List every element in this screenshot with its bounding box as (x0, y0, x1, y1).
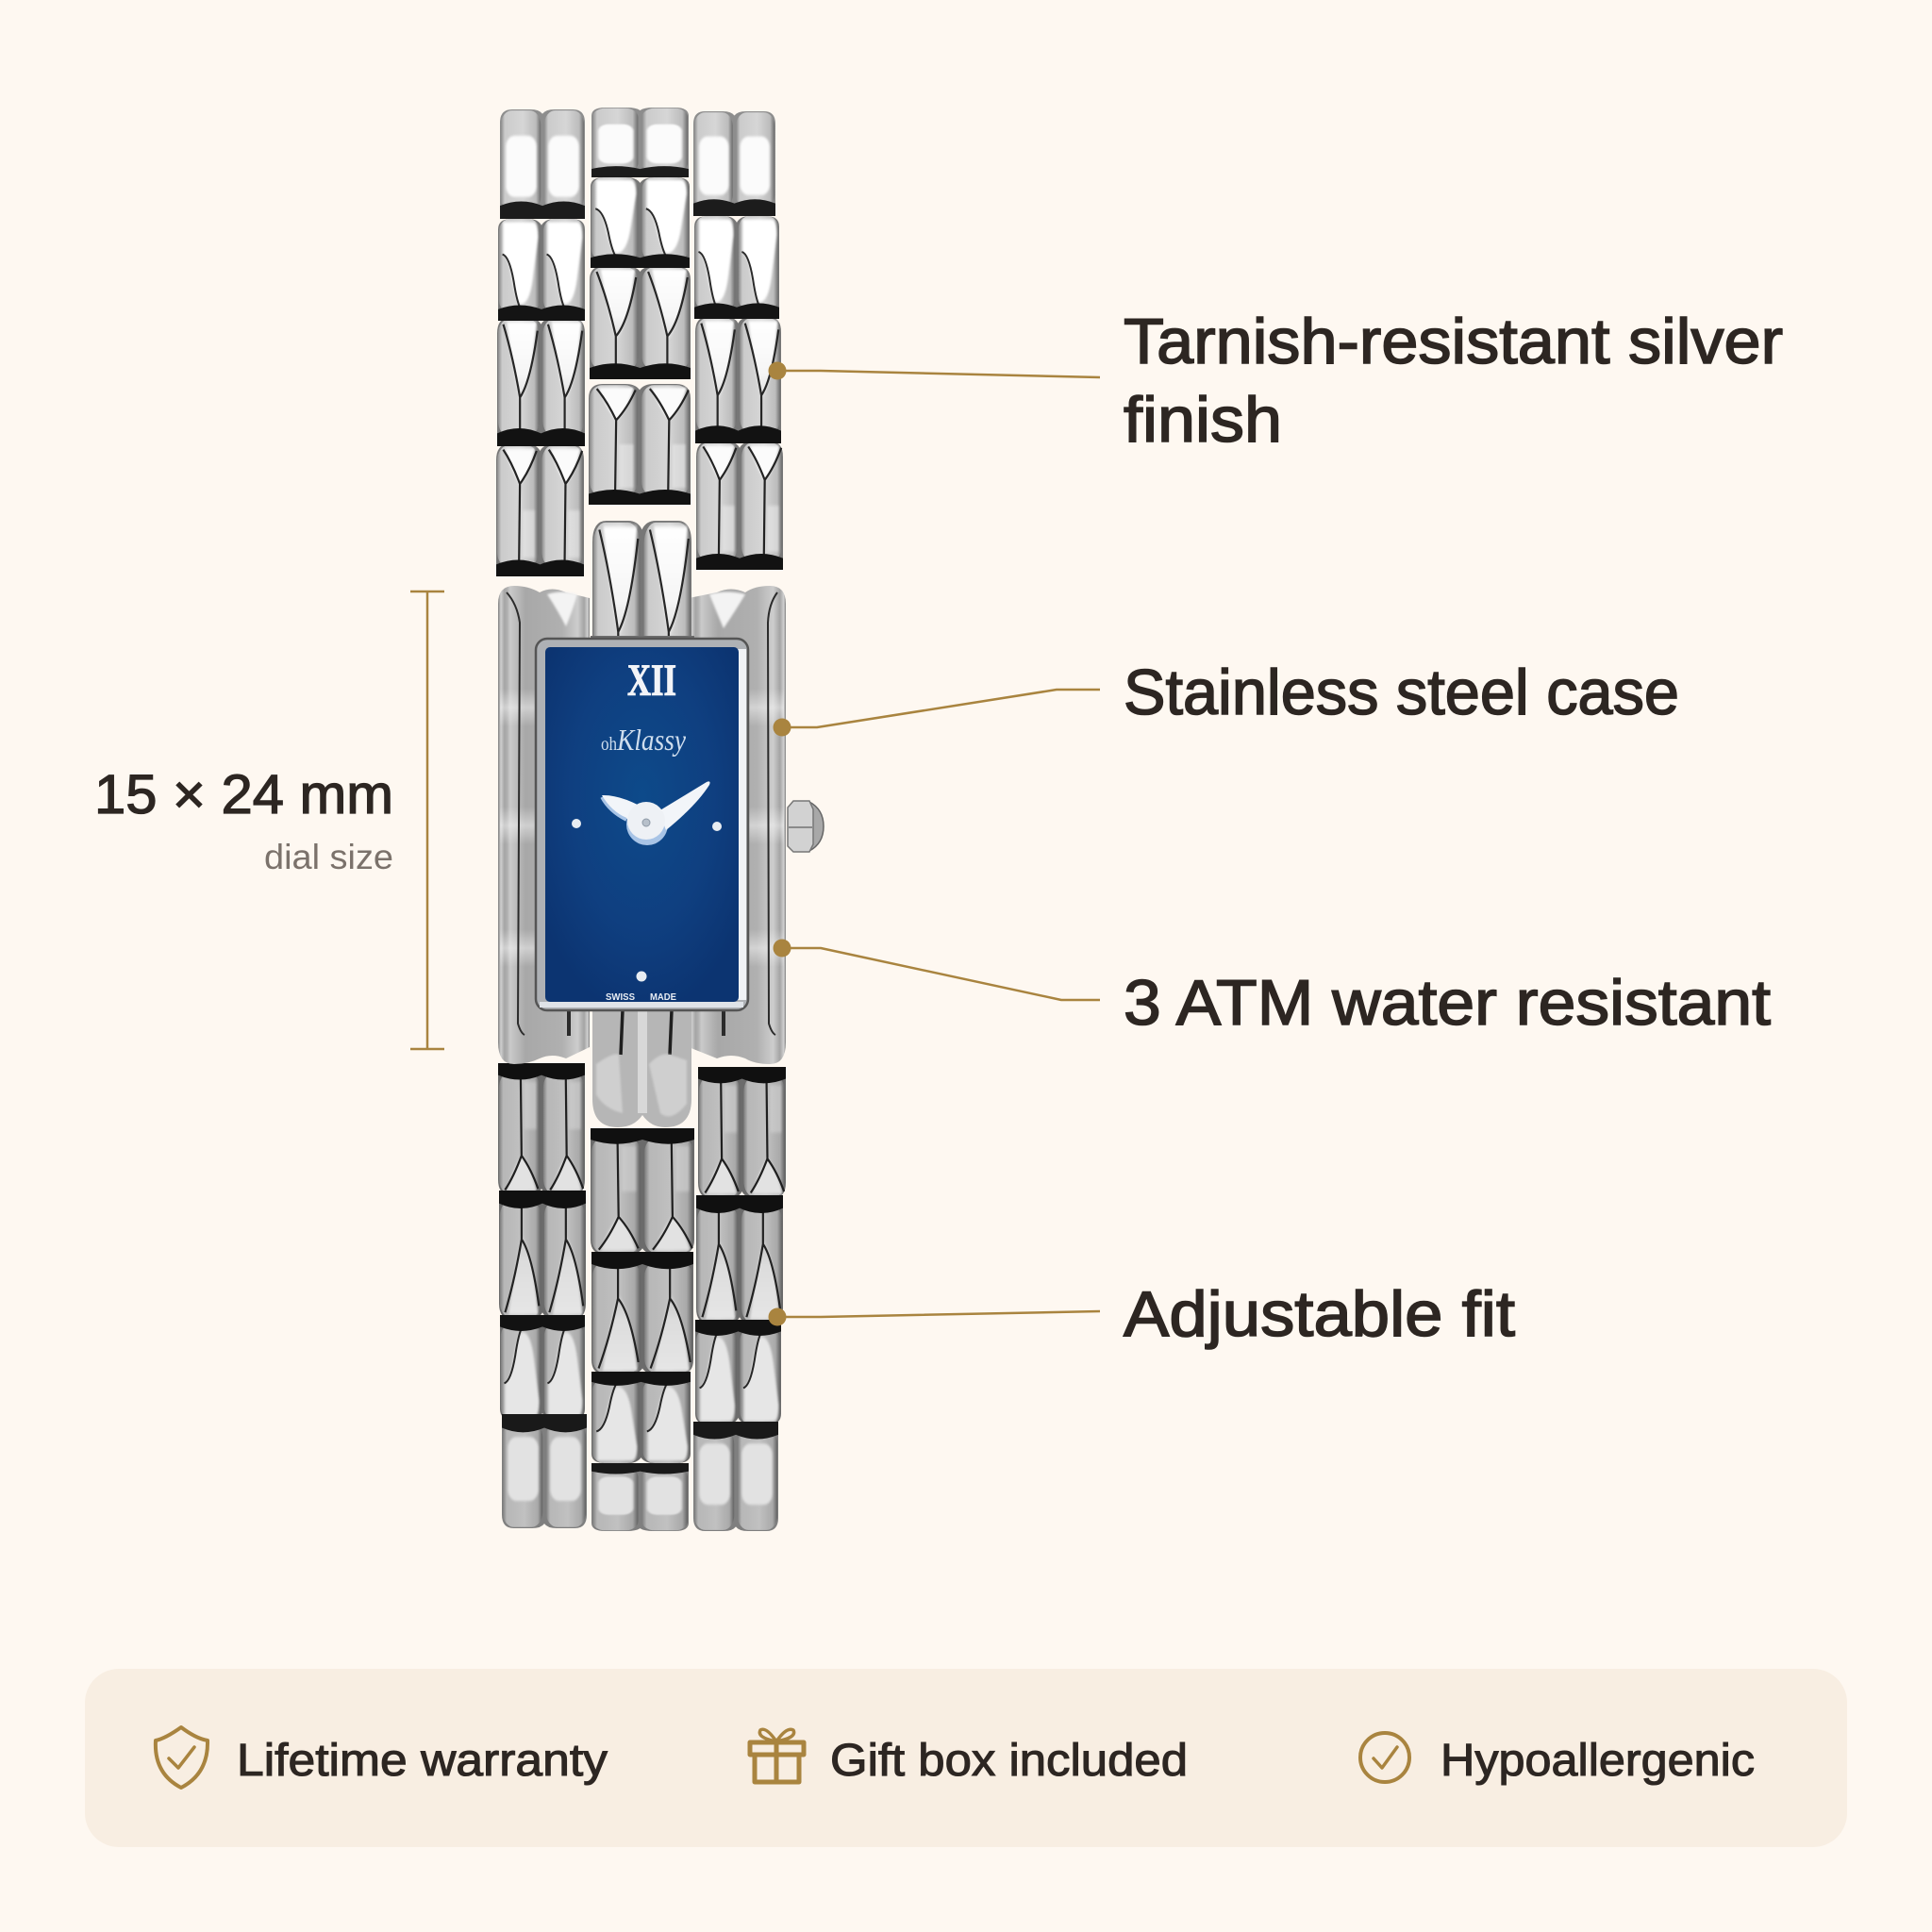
callout text: water: 3 ATM water resistant (1124, 967, 1771, 1039)
hour markers (572, 819, 722, 981)
icon: check circle (1360, 1733, 1409, 1782)
lower bracelet (498, 1063, 786, 1531)
callout text: silver finish (1124, 306, 1783, 456)
label: hypoallergenic: Hypoallergenic (1441, 1736, 1755, 1786)
dimension label: 15 × 24 mm (94, 764, 393, 825)
bottom panel (85, 1669, 1847, 1847)
icon: gift box (750, 1729, 804, 1782)
crown (788, 801, 824, 852)
callout line: silver finish (768, 362, 1100, 379)
upper bracelet (496, 108, 783, 576)
callout line: water (774, 940, 1100, 1000)
callout line: fit (768, 1307, 1100, 1326)
callout text: silver finish: Tarnish-resistant silver (1124, 306, 1783, 377)
swiss made: SWISS (606, 992, 635, 1003)
blue dial (545, 647, 739, 1002)
label: gift box: Gift box included (830, 1736, 1188, 1786)
watch case (498, 586, 786, 1064)
dimension caption: dial size (264, 838, 393, 876)
callout text: fit: Adjustable fit (1124, 1278, 1515, 1350)
callout line: case (774, 690, 1100, 736)
hands (602, 781, 710, 845)
centre link above dial (591, 521, 694, 700)
dial logo: ohKlassy (601, 723, 687, 757)
dial numeral: XII (627, 656, 676, 706)
callout text: case: Stainless steel case (1124, 657, 1679, 728)
centre link below dial (592, 1000, 691, 1127)
watch (496, 108, 824, 1531)
icon: shield (156, 1727, 208, 1788)
dimension bracket (410, 591, 444, 1049)
swiss made (606, 992, 676, 1003)
dial bezel (536, 639, 748, 1010)
swiss made: MADE (650, 992, 676, 1003)
callout text: silver finish: finish (1124, 384, 1282, 456)
label: warranty: Lifetime warranty (237, 1736, 608, 1786)
